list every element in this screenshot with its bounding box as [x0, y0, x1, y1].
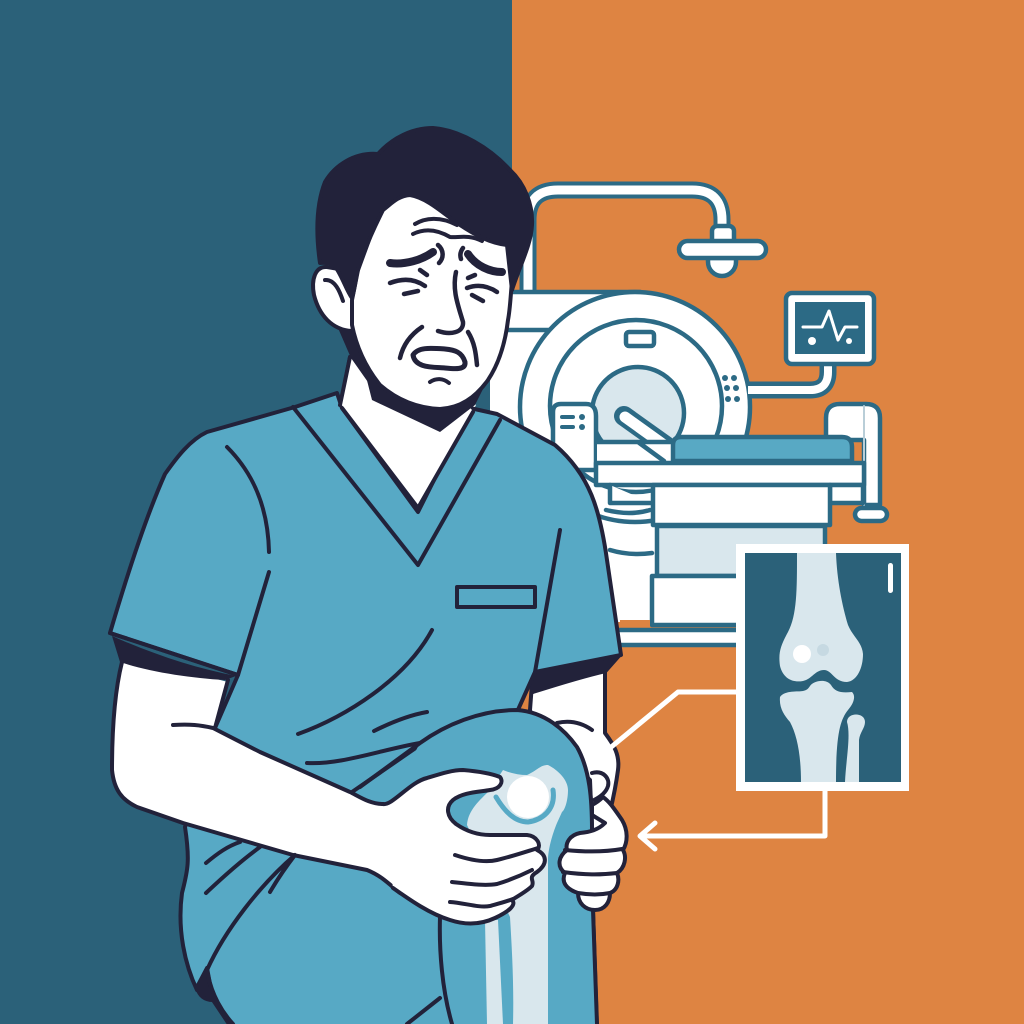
grip finger lines — [563, 849, 622, 894]
housing top line — [505, 292, 640, 330]
film marker — [888, 563, 893, 593]
lower lip line — [430, 379, 449, 383]
ceiling lamp — [679, 226, 766, 276]
tibia overlay — [467, 765, 568, 1024]
collar lines — [293, 407, 500, 565]
left arm — [112, 655, 470, 915]
lower right support — [830, 485, 863, 503]
face — [352, 190, 520, 409]
left eye — [390, 270, 427, 294]
tilted positioning pad — [608, 442, 672, 463]
scanner housing — [490, 292, 655, 622]
callout connector: x-ray to elbow — [610, 692, 736, 748]
left arm outer outline — [112, 662, 400, 893]
knee outline — [360, 710, 597, 1024]
patella — [507, 776, 549, 818]
pad cover — [597, 443, 672, 463]
fibula overlay — [485, 920, 503, 1024]
pad line — [597, 442, 672, 461]
floor plate — [600, 630, 740, 645]
table bed — [596, 463, 864, 485]
tibia bone — [780, 681, 854, 782]
patient mattress — [673, 437, 852, 461]
lower shirt folds — [206, 842, 295, 970]
lower gantry curves — [606, 510, 652, 554]
positioning handle core — [625, 417, 664, 445]
monitor arm — [748, 364, 828, 390]
jaw shadow — [358, 340, 490, 432]
film background — [745, 553, 901, 782]
right eye — [467, 275, 497, 301]
seat shadow — [197, 968, 213, 1000]
right sleeve seam — [535, 530, 560, 672]
panel: right orange background — [512, 0, 1024, 1024]
right underarm shadow — [533, 655, 621, 693]
nose — [438, 272, 463, 333]
vital signs monitor — [786, 293, 874, 364]
neck — [340, 340, 476, 512]
pedestal top — [653, 485, 830, 525]
chest folds — [298, 630, 432, 792]
orange gap — [620, 620, 650, 627]
grimacing mouth — [413, 348, 465, 369]
right eyebrow — [468, 254, 502, 272]
bright spot — [793, 645, 811, 663]
callout arrow: x-ray to knee — [640, 791, 825, 849]
gantry label plate — [626, 332, 654, 346]
left eyebrow — [390, 252, 433, 263]
figure: man in scrubs — [110, 128, 627, 1024]
forehead wrinkles — [413, 219, 482, 241]
film frame — [736, 544, 909, 791]
x-ray film panel — [736, 544, 909, 791]
positioning handle — [624, 416, 666, 446]
neck left line — [340, 357, 350, 408]
hand outline — [383, 770, 545, 924]
lower left support — [610, 485, 652, 503]
finger lines — [450, 848, 538, 906]
right forearm — [530, 670, 618, 835]
pedestal column — [657, 526, 825, 576]
fibula bone — [845, 714, 865, 782]
cheek lines — [400, 327, 477, 365]
arm crease — [557, 722, 592, 730]
neck fill — [341, 350, 472, 509]
pedestal base — [652, 576, 752, 625]
joint arc — [496, 790, 553, 822]
femur bone — [779, 553, 863, 682]
frown lines — [438, 245, 463, 263]
hand fill — [383, 770, 545, 924]
scanner bore — [592, 367, 684, 459]
thigh curve — [208, 975, 440, 1024]
neck shadow by ear — [338, 320, 370, 385]
raised leg and knee — [400, 710, 597, 1024]
hair — [317, 128, 532, 298]
knuckle — [592, 772, 608, 800]
sleeve edge — [215, 680, 228, 728]
ear inner line — [325, 280, 343, 301]
left sleeve shadow patch — [112, 636, 236, 680]
ear — [313, 267, 365, 331]
left sleeve outline — [110, 447, 269, 675]
side control panel — [553, 404, 596, 470]
neck left edge — [340, 357, 350, 405]
MRI scanner machine — [490, 190, 887, 645]
faint spot — [817, 644, 829, 656]
gripping hand — [559, 797, 627, 910]
table head support — [826, 404, 887, 521]
pocket — [457, 587, 535, 607]
gantry outer ring — [520, 292, 750, 522]
control button dots — [722, 375, 740, 402]
panel: left teal background — [0, 0, 512, 1024]
gantry inner ring — [550, 320, 722, 492]
torso and lower body — [110, 393, 621, 1024]
ceiling arm — [528, 190, 722, 296]
